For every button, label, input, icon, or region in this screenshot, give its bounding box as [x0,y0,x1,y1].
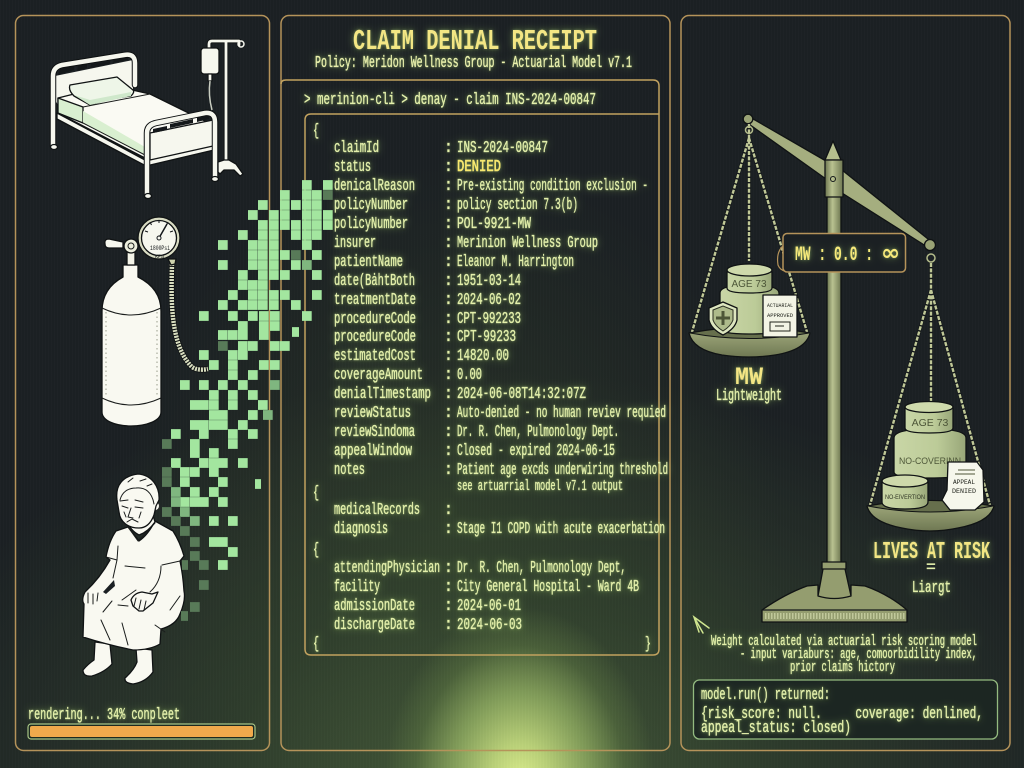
json claim record: { [313,483,319,502]
icon: hospital bed [50,55,218,198]
json claim record: : [444,233,453,252]
icon: balance scale [689,114,994,622]
json claim record: City General Hospital - Ward 4B [457,577,639,596]
json claim record: notes [334,460,365,479]
json claim record: Dr. R. Chen, Pulmonology Dept. [457,422,619,441]
json claim record: { [313,540,319,559]
json claim record: : [444,615,453,634]
model output box: appeal_status: closed) [701,718,851,737]
left chain ring [746,126,752,134]
icon: elderly patient in gown [83,474,184,684]
json claim record: : [444,309,453,328]
json claim record: INS-2024-00847 [457,138,548,157]
json claim record: denicalReason [334,176,415,195]
json claim record: 1951-03-14 [457,271,521,290]
json claim record: procedureCode [334,309,416,328]
json box [305,114,659,655]
json claim record: : [444,290,453,309]
scale beam [746,116,933,248]
json claim record: reviewSindoma [334,422,415,441]
json claim record: claimId [334,138,379,157]
json claim record: Dr. R. Chen, Pulmonology Dept, [457,558,626,577]
left pan [689,328,810,357]
left weights: APPROVED [767,312,794,319]
equals sign: = [926,558,936,577]
json claim record: admissionDate [334,596,415,615]
json claim record: : [444,176,453,195]
icon: IV drip stand [201,41,244,176]
json claim record: } [645,634,651,653]
json claim record: treatmentDate [334,290,416,309]
json claim record: : [444,500,453,519]
panel: patient [16,16,270,750]
right chains [870,263,990,505]
json claim record: : [444,596,453,615]
json claim record: : [444,558,453,577]
json claim record: status [334,157,371,176]
subtitle: Policy: Meridon Wellness Group - Actuarial Model v7.1 [315,53,632,72]
left weights: AGE 73 [731,279,767,290]
json claim record: Closed - expired 2024-06-15 [457,441,615,460]
mid pixels [171,265,312,521]
icon: oxygen tank: KPa [155,253,165,260]
pixel disintegration [162,185,333,616]
json claim record: 2024-06-03 [457,615,522,634]
json claim record: estimatedCost [334,346,416,365]
json claim record: procedureCode [334,327,416,346]
json claim record: insurer [334,233,376,252]
panel: scales [681,16,1010,750]
status text: rendering... 34% conpleet [28,705,180,724]
json claim record: see artuarrial model v7.1 output [457,478,623,495]
json claim record: : [444,403,453,422]
json claim record: Merinion Wellness Group [457,233,598,252]
left weights [709,264,797,337]
left weights: ACTUARIAL [767,302,793,309]
json claim record: policy section 7.3(b) [457,195,578,214]
json claim record: Stage I1 COPD with acute exacerbation [457,519,665,538]
json claim record: : [444,577,453,596]
Liargt label: Liargt [912,578,951,597]
json claim record: 2024-06-08T14:32:07Z [457,384,586,403]
right weights: APPEAL [953,479,975,486]
json claim record: 0.00 [457,365,482,384]
json claim record: : [444,460,453,479]
json claim record: policyNumber [334,195,408,214]
right weights: DENIED [952,488,976,495]
title: CLAIM DENIAL RECEIPT [353,25,597,58]
json claim record: : [444,214,453,233]
json claim record: patientName [334,252,403,271]
Lightweight label: Lightweight [716,386,782,405]
json claim record: : [444,252,453,271]
json claim record: reviewStatus [334,403,411,422]
panel: claim receipt [281,16,670,750]
json claim record: : [444,271,453,290]
model output box: model.run() returned: [701,685,830,704]
progress bar [28,724,255,739]
json claim record: : [444,346,453,365]
right pan [867,500,994,531]
right weights: NO-EIVERTION [885,494,925,501]
json claim record: : [444,441,453,460]
json claim record: CPT-99233 [457,327,516,346]
bright pixels [171,185,333,565]
json claim record: facility [334,577,380,596]
json claim record: : [444,384,453,403]
terminal box [281,80,659,655]
scale base [762,562,907,622]
json claim record: 2024-06-01 [457,596,521,615]
scale pole [827,195,841,565]
right weights [882,402,984,510]
json claim record: policyNumber [334,214,408,233]
json claim record: Patient age excds underwiring threshold [457,460,668,479]
json claim record: : [444,422,453,441]
json claim record: POL-9921-MW [457,214,531,233]
right weights: AGE 73 [912,417,949,429]
json claim record: DENIED [457,157,501,176]
right weights: NO-COVERINN [899,456,961,466]
json claim record: : [444,365,453,384]
json claim record: 14820.00 [457,346,509,365]
json claim record: : [444,157,453,176]
icon: oxygen tank: 1800Psi [150,245,170,252]
json claim record: denialTimestamp [334,384,431,403]
left chains [692,124,807,332]
json claim record: : [444,327,453,346]
json claim record: CPT-992233 [457,309,521,328]
ratio label: ∞ [881,241,900,266]
MW label: MW [735,363,763,392]
json claim record: attendingPhysician [334,558,440,577]
json claim record: dischargeDate [334,615,415,634]
icon: pointer arrow [694,617,709,633]
icon: oxygen tank [102,217,208,426]
json claim record: Eleanor M. Harrington [457,252,574,271]
weight explanation: prior claims hictory [790,659,895,676]
json claim record: Auto-denied - no human reviev requied [457,403,666,422]
json claim record: : [444,138,453,157]
ratio label [778,234,906,272]
json claim record: Pre-existing condition exclusion - [457,176,648,195]
json claim record [313,121,668,653]
json claim record: coverageAmount [334,365,423,384]
model output box [694,680,998,739]
dim pixels [162,195,333,616]
json claim record: 2024-06-02 [457,290,521,309]
json claim record: { [313,121,319,140]
right chain ring [927,254,935,262]
ratio label: MW : 0.0 : [795,244,873,267]
json claim record: medicalRecords [334,500,420,519]
json claim record: date(BȧhtBoth [334,271,415,290]
weight explanation [711,633,977,676]
json claim record: : [444,195,453,214]
json claim record: { [313,634,319,653]
json claim record: appealWindow [334,441,412,460]
command prompt: > merinion-cli > denay - claim INS-2024-00847 [304,90,596,109]
json claim record: : [444,519,453,538]
json claim record: diagnosis [334,519,388,538]
